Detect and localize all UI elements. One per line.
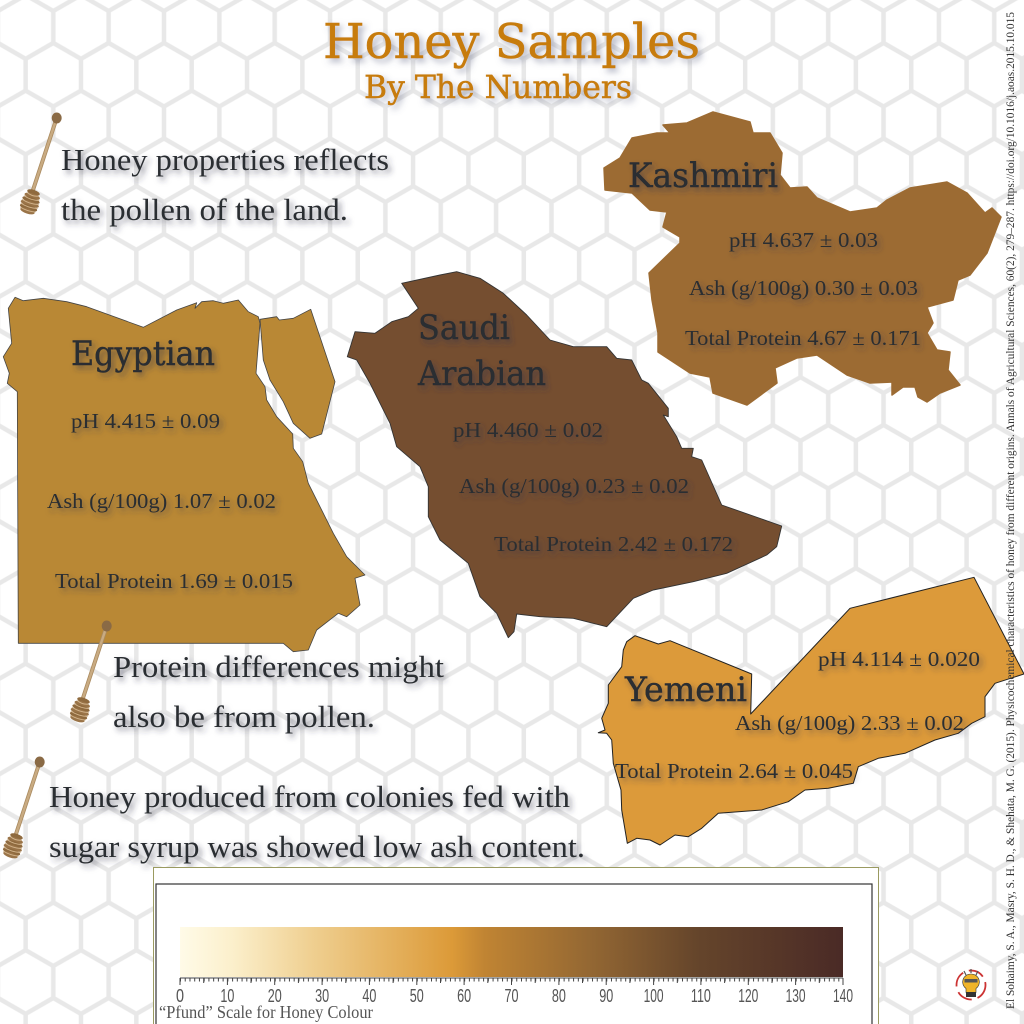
scale labels: 60 xyxy=(457,986,471,1006)
text block: pollen of the land: Honey properties reflects xyxy=(61,142,389,177)
gradient bar xyxy=(180,927,843,977)
stats: Saudi Arabian: Ash (g/100g) 0.23 ± 0.02 xyxy=(459,474,689,498)
panel: Egyptian xyxy=(3,297,365,652)
panel: Kashmiri xyxy=(604,112,1001,405)
heading: Kashmiri: Kashmiri xyxy=(628,156,778,196)
stats: Yemeni xyxy=(615,647,980,783)
icon: honey dipper 2 xyxy=(68,620,112,724)
scale labels: 120 xyxy=(738,986,758,1006)
stats: Kashmiri: pH 4.637 ± 0.03 xyxy=(729,228,878,252)
text block: protein differences: Protein differences might xyxy=(113,649,444,684)
stats: Saudi Arabian xyxy=(453,418,733,556)
scale labels: 90 xyxy=(599,986,613,1006)
title xyxy=(323,14,700,106)
scale labels: 100 xyxy=(644,986,664,1006)
title: By The Numbers xyxy=(364,68,632,106)
stats: Egyptian: Ash (g/100g) 1.07 ± 0.02 xyxy=(47,489,276,513)
icon: honey dipper 3 xyxy=(1,756,45,860)
scale labels: 140 xyxy=(833,986,853,1006)
scale labels: 70 xyxy=(504,986,518,1006)
title: Honey Samples xyxy=(323,14,700,70)
stats: Yemeni: Total Protein 2.64 ± 0.045 xyxy=(615,759,853,783)
scale labels: 20 xyxy=(268,986,282,1006)
stats: Kashmiri: Total Protein 4.67 ± 0.171 xyxy=(685,326,921,350)
heading: Saudi Arabian xyxy=(417,308,546,394)
text block: pollen of the land xyxy=(61,142,389,227)
scale labels xyxy=(176,986,853,1006)
panel: Yemeni xyxy=(598,577,1024,845)
text block: sugar syrup: Honey produced from colonies fed with xyxy=(49,779,571,814)
heading: Egyptian: Egyptian xyxy=(71,334,215,374)
scale labels: 30 xyxy=(315,986,329,1006)
scale labels: 80 xyxy=(552,986,566,1006)
text block: protein differences: also be from pollen. xyxy=(113,699,375,734)
stats: Egyptian: pH 4.415 ± 0.09 xyxy=(71,409,220,433)
scale labels: 10 xyxy=(220,986,234,1006)
heading: Saudi Arabian: Saudi xyxy=(418,308,510,348)
heading: Saudi Arabian: Arabian xyxy=(417,354,546,394)
scale labels: 110 xyxy=(691,986,711,1006)
scale labels: 0 xyxy=(176,986,184,1006)
icon: honey dipper 1 xyxy=(18,112,62,216)
stats: Saudi Arabian: pH 4.460 ± 0.02 xyxy=(453,418,603,442)
stats: Egyptian: Total Protein 1.69 ± 0.015 xyxy=(55,569,293,593)
stats: Saudi Arabian: Total Protein 2.42 ± 0.172 xyxy=(494,532,733,556)
shape: Sinai xyxy=(260,309,335,438)
stats: Yemeni: pH 4.114 ± 0.020 xyxy=(818,647,980,671)
stats: Kashmiri: Ash (g/100g) 0.30 ± 0.03 xyxy=(689,276,918,300)
panel: Saudi Arabian xyxy=(347,272,782,638)
text block: pollen of the land: the pollen of the land. xyxy=(61,192,348,227)
scale ticks xyxy=(180,978,843,985)
stats: Egyptian xyxy=(47,409,293,593)
scale labels: 40 xyxy=(362,986,376,1006)
text block: sugar syrup xyxy=(49,779,585,864)
stats: Kashmiri xyxy=(685,228,921,350)
scale labels: 130 xyxy=(786,986,806,1006)
heading: Yemeni: Yemeni xyxy=(624,670,747,710)
stats: Yemeni: Ash (g/100g) 2.33 ± 0.02 xyxy=(735,711,964,735)
icon: light bulb logo xyxy=(956,969,986,1000)
text block: protein differences xyxy=(113,649,444,734)
scale labels: 50 xyxy=(410,986,424,1006)
scale caption: “Pfund” Scale for Honey Colour xyxy=(159,1002,373,1022)
text block: sugar syrup: sugar syrup was showed low ash content. xyxy=(49,829,585,864)
panel: Pfund colour scale xyxy=(154,868,878,1024)
